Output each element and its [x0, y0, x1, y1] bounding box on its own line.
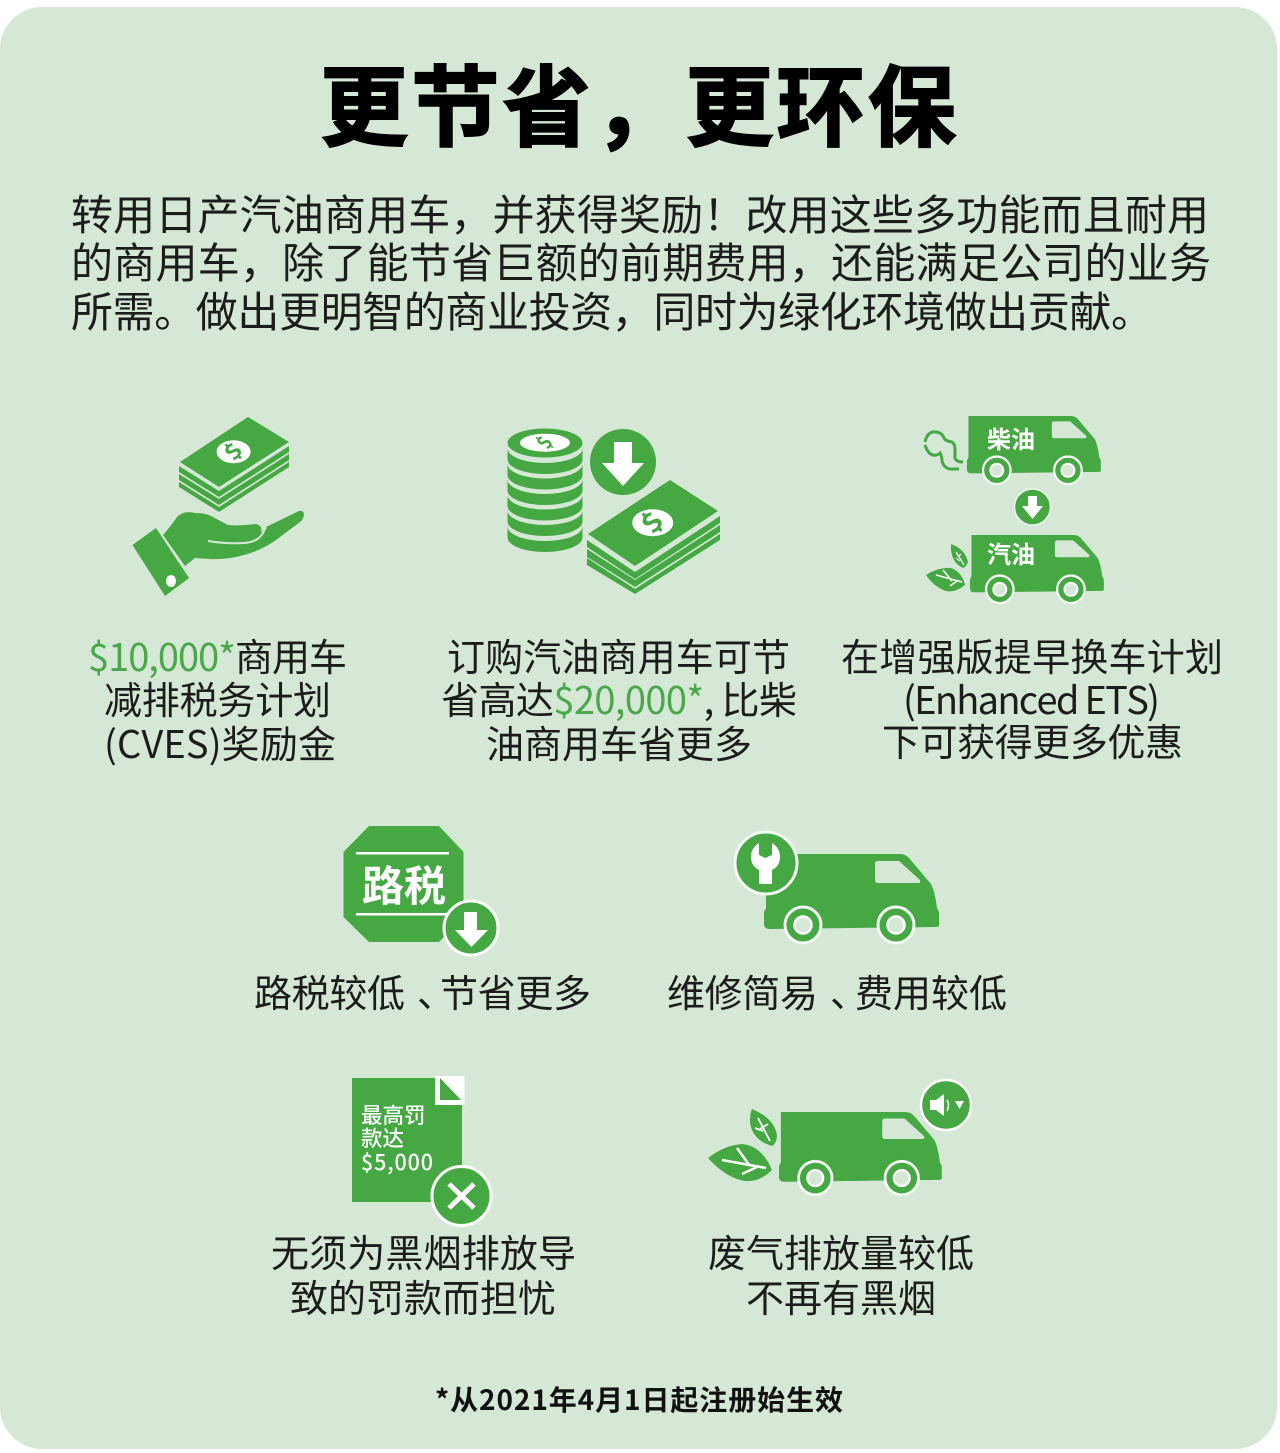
- icon: van with wrench: [735, 832, 939, 943]
- icon: fine document: 款达: [361, 1122, 404, 1153]
- icon: fine document: [352, 1076, 491, 1226]
- icon: road tax octagon: [344, 826, 498, 955]
- label: savings over diesel: 订购汽油商用车可节: [447, 627, 790, 682]
- label: CVES incentive: 减排税务计划: [104, 670, 331, 725]
- label: maintenance: 、: [830, 963, 868, 1018]
- label: no fines: 致的罚款而担忧: [290, 1268, 556, 1323]
- label: lower emissions: 不再有黑烟: [746, 1268, 936, 1323]
- label: enhanced ETS: 在增强版提早换车计划: [841, 627, 1223, 682]
- icon: diesel van to petrol van: 汽油: [987, 535, 1035, 570]
- label: CVES incentive: (CVES)奖励金: [104, 714, 336, 769]
- footnote: *从2021年4月1日起注册始生效: [435, 1379, 843, 1419]
- label: enhanced ETS: 下可获得更多优惠: [882, 712, 1183, 767]
- label: savings over diesel: 省高达$20,000*, 比柴: [441, 670, 797, 725]
- label: road tax: 、: [417, 963, 455, 1018]
- label: CVES incentive: [88, 627, 347, 769]
- label: savings over diesel: [441, 627, 797, 769]
- intro text block: 的商用车，除了能节省巨额的前期费用，还能满足公司的业务: [71, 230, 1211, 291]
- icon: coins, cash and down arrow: [508, 428, 720, 594]
- label: maintenance: [667, 963, 1007, 1018]
- label: lower emissions: [708, 1223, 974, 1323]
- label: maintenance: 维修简易: [667, 963, 818, 1018]
- label: no fines: 无须为黑烟排放导: [271, 1223, 576, 1278]
- icon: fine document: $5,000: [361, 1146, 433, 1177]
- intro text block: 转用日产汽油商用车，并获得奖励！改用这些多功能而且耐用: [71, 182, 1209, 243]
- icon: quiet van with leaves: [708, 1080, 971, 1195]
- intro text block: 所需。做出更明智的商业投资，同时为绿化环境做出贡献。: [71, 279, 1153, 340]
- label: enhanced ETS: [841, 627, 1223, 767]
- title: 更节省，更环保: [320, 38, 956, 165]
- label: CVES incentive: $10,000*商用车: [88, 627, 347, 682]
- label: no fines: [271, 1223, 576, 1323]
- icon: coins, cash and down arrow: $: [631, 502, 672, 541]
- label: savings over diesel: 油商用车省更多: [486, 714, 752, 769]
- icon: fine document: 最高罚: [361, 1099, 426, 1130]
- icon: road tax octagon: 路税: [362, 853, 446, 914]
- icon: coins, cash and down arrow: $: [529, 430, 559, 454]
- icon: hand holding cash: [132, 417, 304, 596]
- label: maintenance: 费用较低: [855, 963, 1007, 1018]
- intro text block: [71, 182, 1211, 340]
- label: road tax: 路税较低: [254, 963, 405, 1018]
- icon: diesel van to petrol van: 柴油: [987, 420, 1035, 455]
- icon: hand holding cash: $: [215, 434, 249, 466]
- label: road tax: [254, 963, 591, 1018]
- label: enhanced ETS: (Enhanced ETS): [903, 670, 1160, 725]
- label: road tax: 节省更多: [440, 963, 591, 1018]
- icon: diesel van to petrol van: [925, 416, 1104, 603]
- label: lower emissions: 废气排放量较低: [708, 1223, 974, 1278]
